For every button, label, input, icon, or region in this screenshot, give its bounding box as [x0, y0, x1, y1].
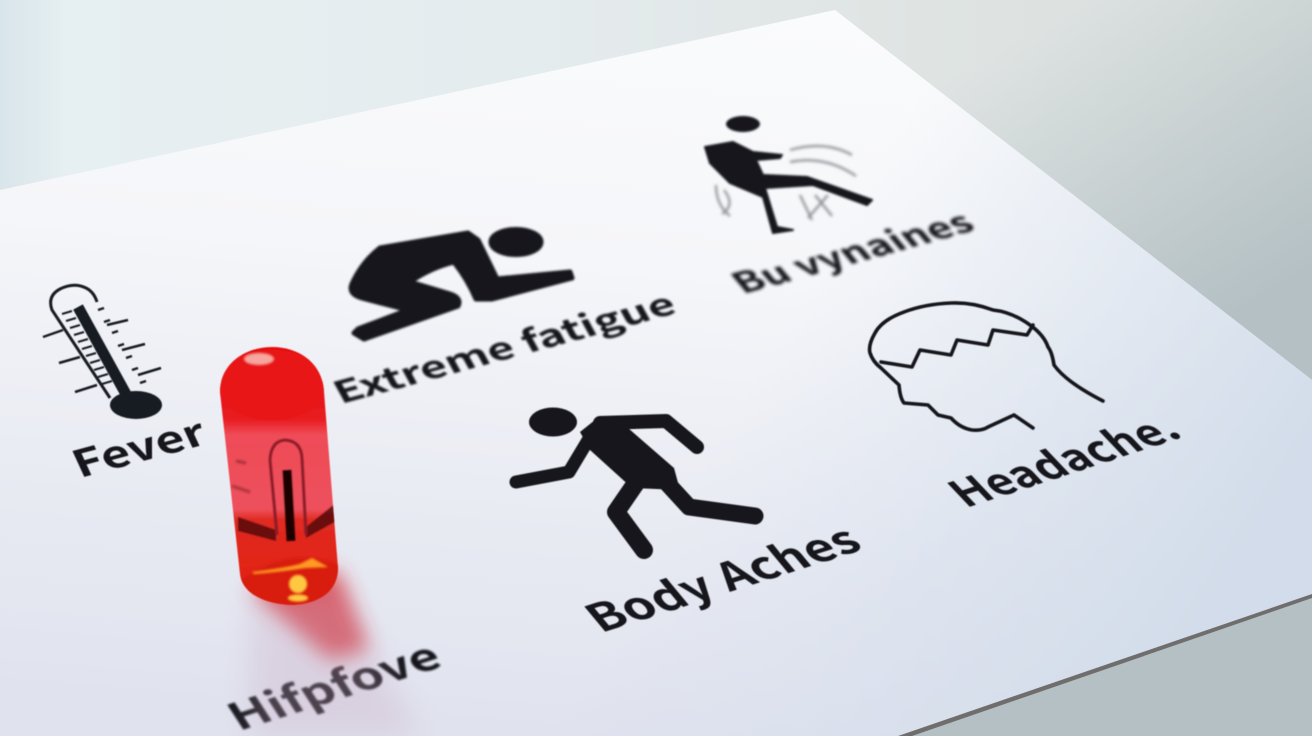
icon: headache head outline [870, 303, 1103, 430]
capsule glint [252, 558, 328, 574]
capsule dark band [238, 503, 338, 541]
label: Headache: Headache. [931, 400, 1194, 518]
capsule bottom glow [288, 575, 308, 602]
capsule dome [218, 350, 326, 420]
label: blurred symptom text: Bu vynaines [718, 200, 984, 302]
icon: thermometer [43, 285, 162, 419]
label: Fever: Fever [62, 403, 215, 489]
capsule body [220, 346, 338, 606]
icon: fatigue figure [351, 230, 572, 339]
capsule inner thermometer [270, 440, 306, 541]
icon: aching figure with nerves [705, 116, 872, 233]
nerve lines [716, 146, 856, 220]
label: Body Aches: Body Aches [569, 510, 874, 643]
capsule lower glass [240, 558, 338, 606]
capsule highlight [244, 353, 274, 365]
capsule marks [232, 461, 250, 492]
icon: red capsule [215, 345, 345, 610]
icon: running figure [516, 408, 755, 550]
paper edge [898, 594, 1312, 736]
pill shadow [250, 570, 420, 736]
label: Extreme fatigue: Extreme fatigue [323, 280, 684, 413]
